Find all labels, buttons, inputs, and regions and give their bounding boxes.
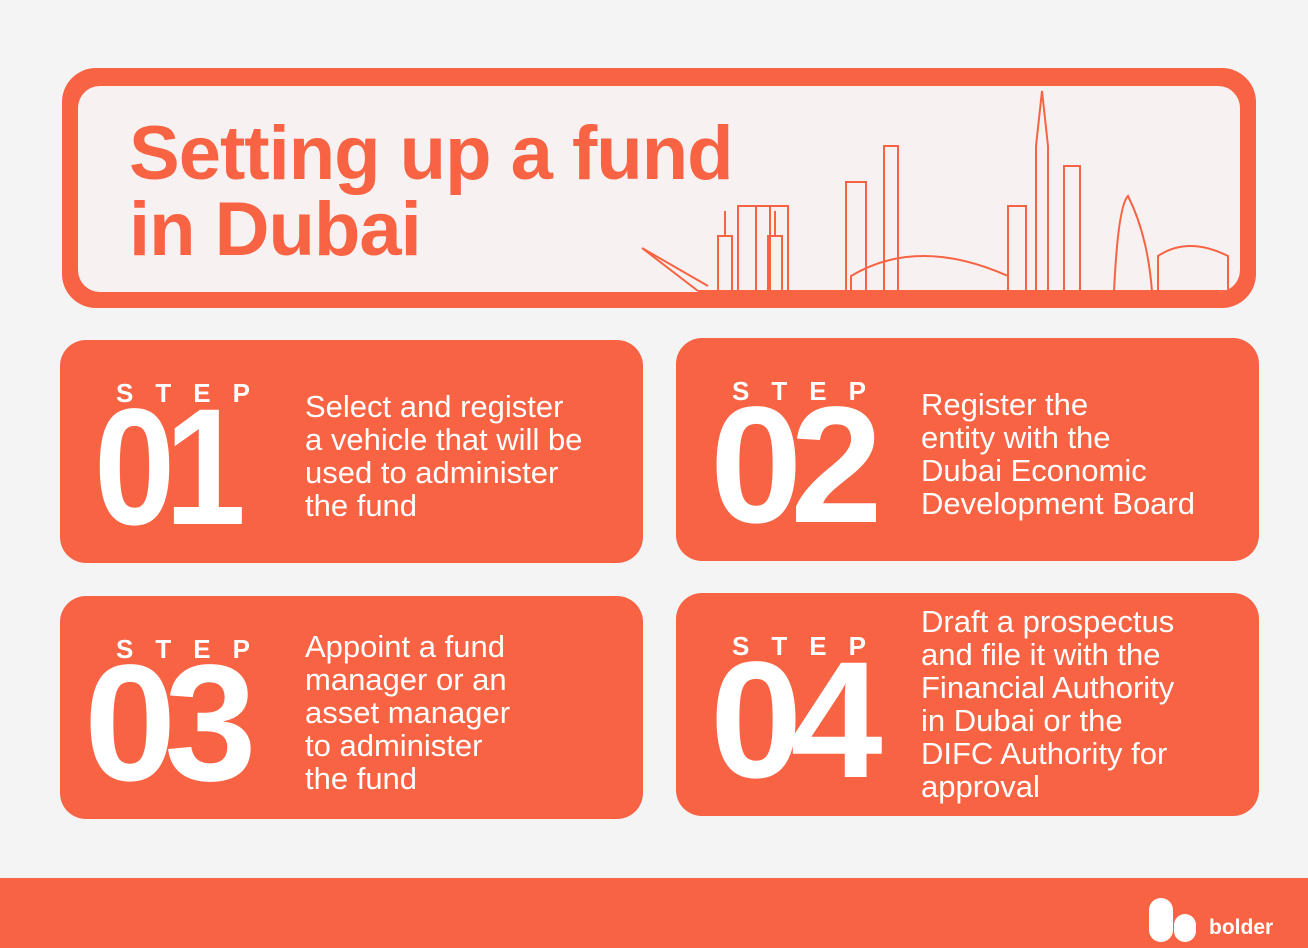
card: step 04: Financial Authority [921,670,1174,705]
card: step 04: STEP [732,631,888,661]
card: step 03: manager or an [305,662,507,697]
card: step 02: Register the [921,387,1088,422]
title: in Dubai [129,187,421,272]
logo: bolder: bolder [1209,916,1273,939]
card: step 01: STEP [116,378,272,408]
header frame [62,68,1256,308]
title [129,111,733,272]
card: step 01: a vehicle that will be [305,422,582,457]
card: step 03: Appoint a fund [305,629,505,664]
title: Setting up a fund [129,111,733,196]
card: step 04 [676,593,1259,816]
card: step 04: DIFC Authority for [921,736,1167,771]
card: step 02: STEP [732,376,888,406]
card: step 03 [60,596,643,819]
footer [0,878,1308,948]
card: step 03: STEP [116,634,272,664]
card: step 04: and file it with the [921,637,1161,672]
card: step 02 [676,338,1259,561]
card: step 02: Dubai Economic [921,453,1147,488]
card: step 03: the fund [305,761,417,796]
card: step 02: entity with the [921,420,1111,455]
card: step 04: Draft a prospectus [921,604,1174,639]
card: step 01: Select and register [305,389,563,424]
card: step 03: to administer [305,728,482,763]
card: step 02: 02 [710,373,871,558]
card: step 01: 01 [94,375,235,560]
card: step 04: approval [921,769,1040,804]
skyline illustration [642,90,1229,292]
logo: bolder [1149,898,1273,942]
card: step 01: used to administer [305,455,558,490]
card: step 04: 04 [710,628,871,813]
card: step 03: asset manager [305,695,510,730]
card: step 01: the fund [305,488,417,523]
card: step 02: Development Board [921,486,1195,521]
card: step 01 [60,340,643,563]
card: step 04: in Dubai or the [921,703,1123,738]
card: step 03: 03 [84,631,245,816]
